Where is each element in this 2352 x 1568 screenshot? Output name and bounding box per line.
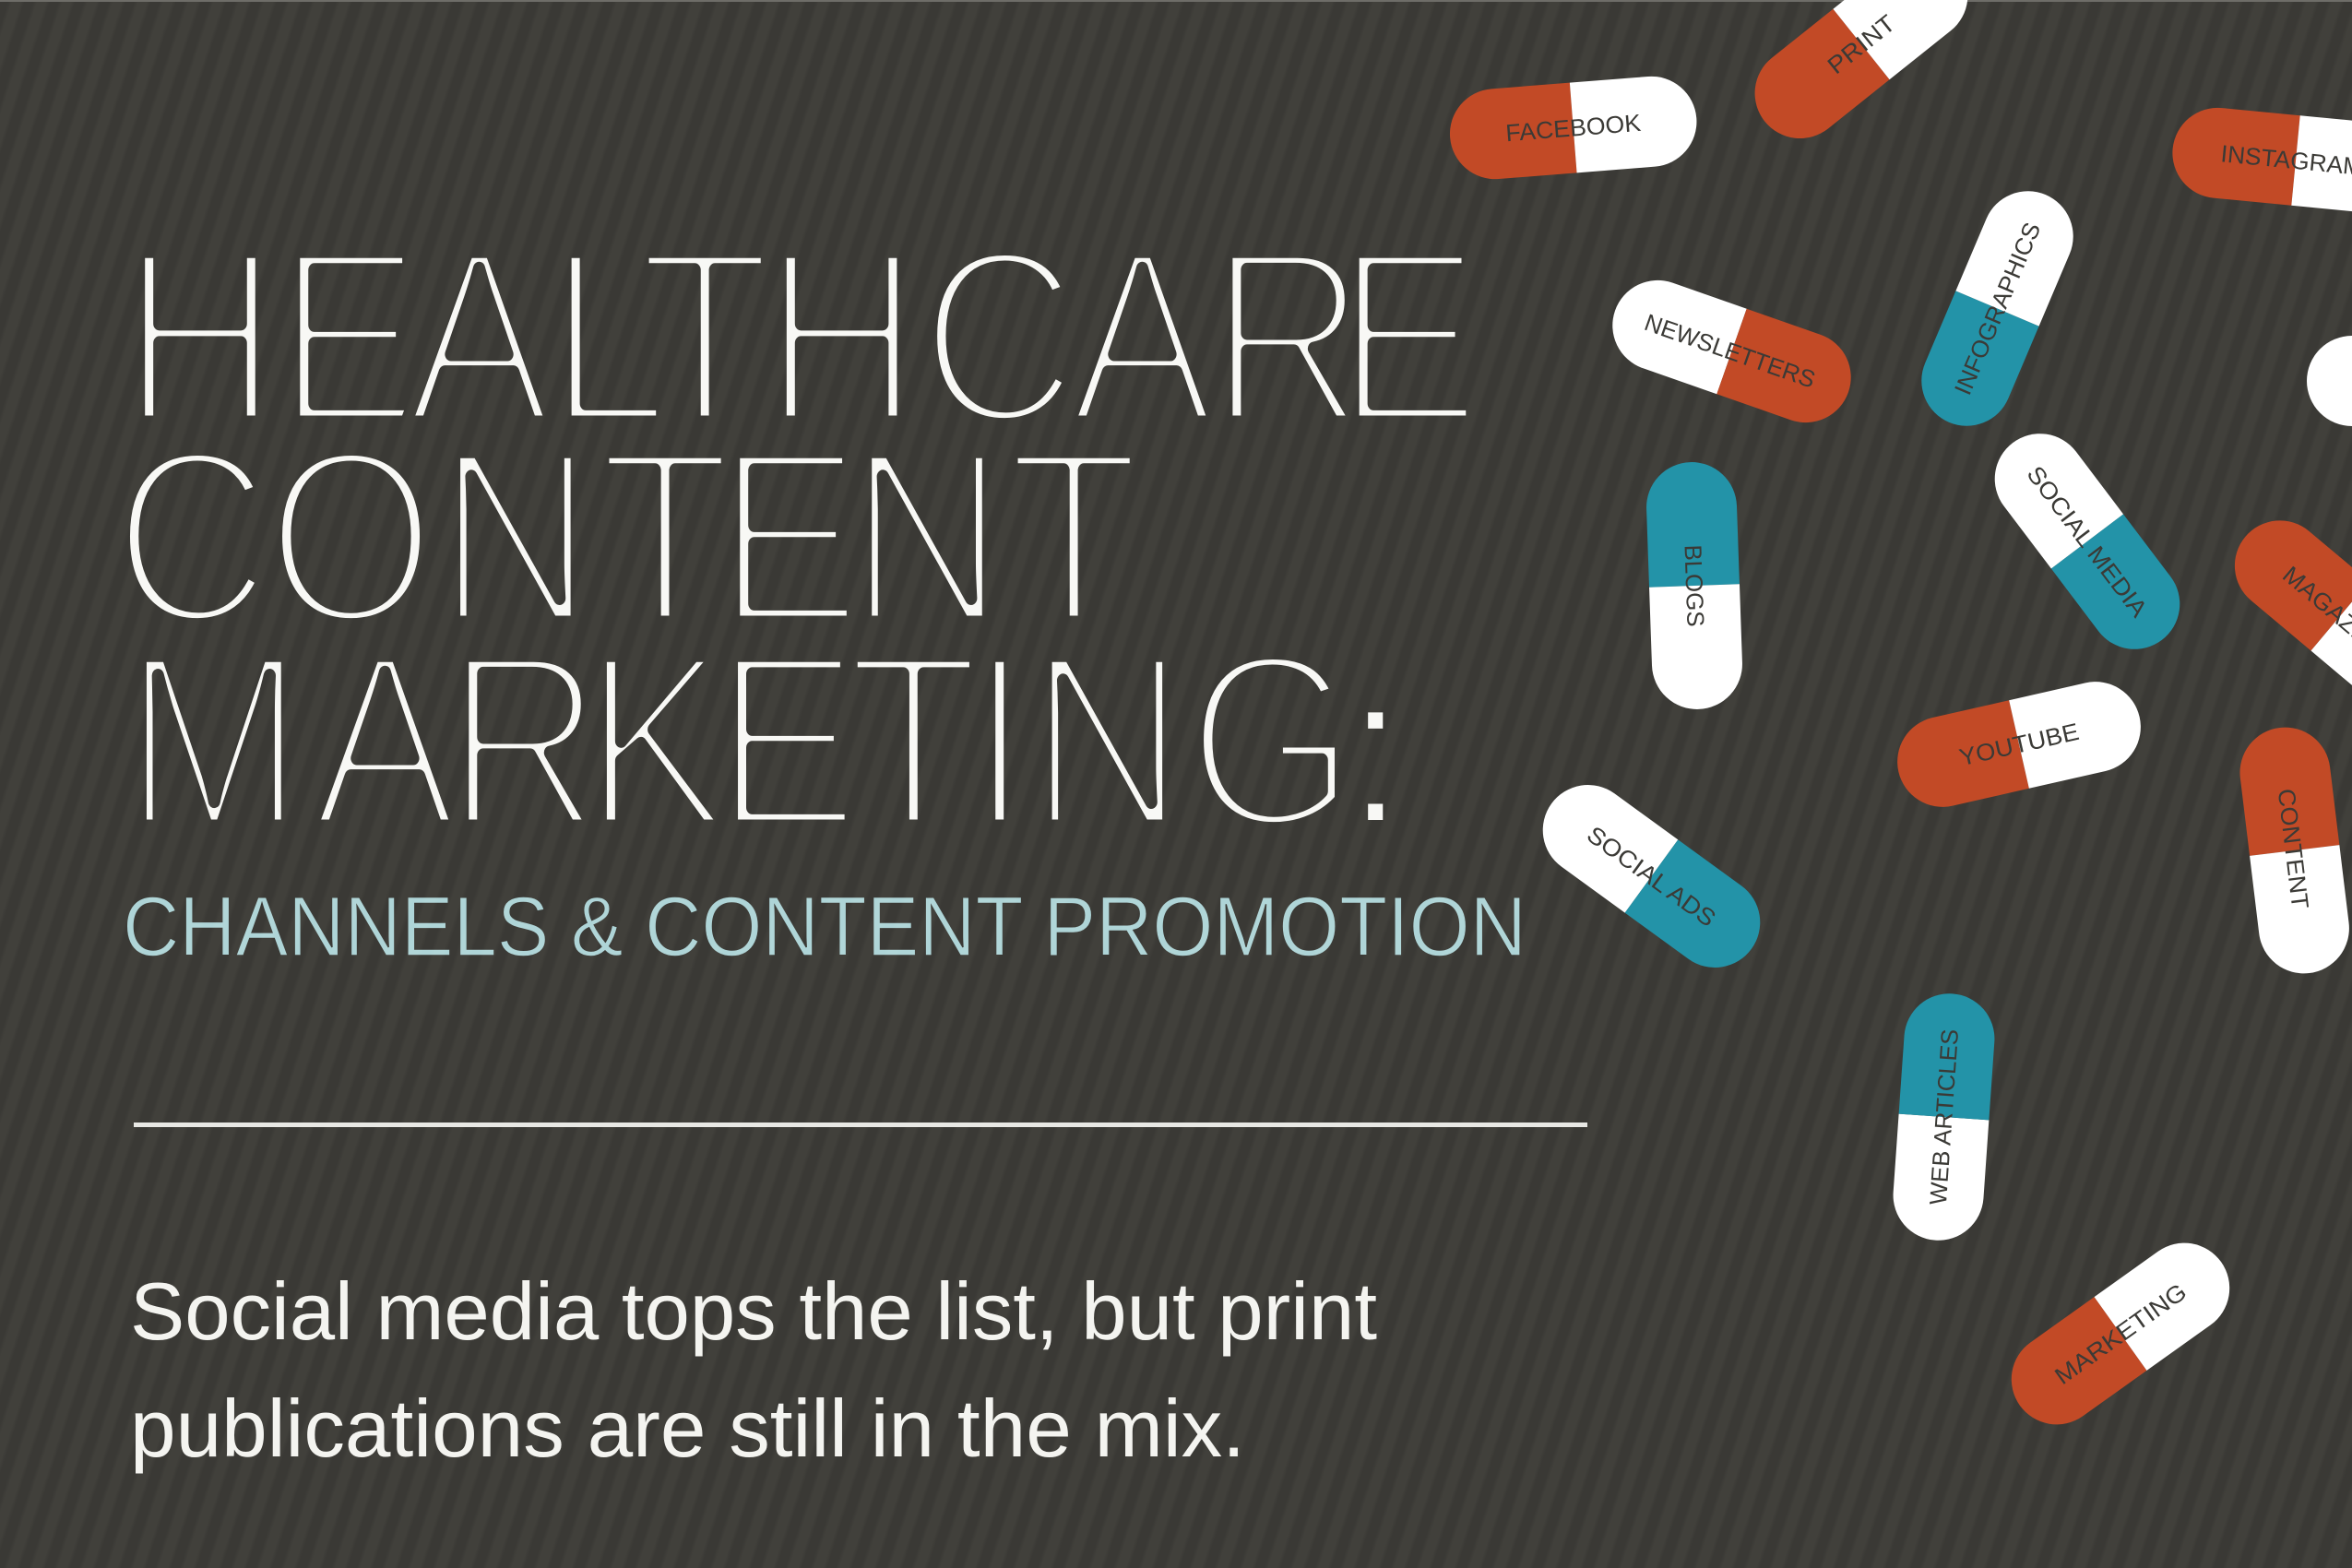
pill: Magazines bbox=[2216, 502, 2352, 731]
pill: Marketing: MARKETING bbox=[2049, 1277, 2192, 1390]
pill: Instagram bbox=[2168, 103, 2352, 218]
pill: unlabeled white, right edge bbox=[2307, 336, 2352, 426]
pill: Web Articles: WEB ARTICLES bbox=[1924, 1028, 1964, 1206]
pill: Content bbox=[2235, 722, 2352, 979]
pill: Newsletters bbox=[1600, 267, 1863, 435]
title bbox=[113, 197, 1481, 879]
pill: Newsletters: NEWSLETTERS bbox=[1641, 308, 1819, 394]
pill: Facebook: FACEBOOK bbox=[1504, 109, 1643, 147]
title: MARKETING bbox=[123, 601, 1357, 879]
pill: Social Ads: SOCIAL ADS bbox=[1582, 820, 1721, 932]
pill: Print: PRINT bbox=[1822, 9, 1901, 79]
title: CONTENT bbox=[113, 398, 1141, 675]
pill: Infographics bbox=[1907, 177, 2087, 440]
pills bbox=[1446, 0, 2352, 1443]
pill: YouTube bbox=[1888, 673, 2150, 815]
pill: Marketing bbox=[1993, 1225, 2248, 1443]
title: : bbox=[1346, 630, 1405, 869]
pill: Social Media bbox=[1977, 416, 2198, 667]
pill: Social Ads bbox=[1525, 767, 1778, 985]
pill: Print bbox=[1737, 0, 1986, 157]
pill: YouTube: YOUTUBE bbox=[1956, 718, 2082, 771]
pill: Facebook bbox=[1446, 73, 1700, 183]
description text: publications are still in the mix. bbox=[130, 1383, 1245, 1474]
description text bbox=[130, 1265, 1377, 1474]
subtitle: CHANNELS & CONTENT PROMOTION bbox=[123, 880, 1526, 974]
pill: Social Media: SOCIAL MEDIA bbox=[2022, 460, 2154, 623]
pill: Infographics: INFOGRAPHICS bbox=[1949, 219, 2046, 398]
title: HEALTHCARE bbox=[121, 197, 1481, 475]
pill: Blogs bbox=[1645, 460, 1744, 711]
pill: Content: CONTENT bbox=[2273, 787, 2314, 910]
pill: Blogs: BLOGS bbox=[1679, 544, 1710, 627]
pill: Web Articles bbox=[1890, 991, 1998, 1243]
description text: Social media tops the list, but print bbox=[130, 1265, 1377, 1357]
